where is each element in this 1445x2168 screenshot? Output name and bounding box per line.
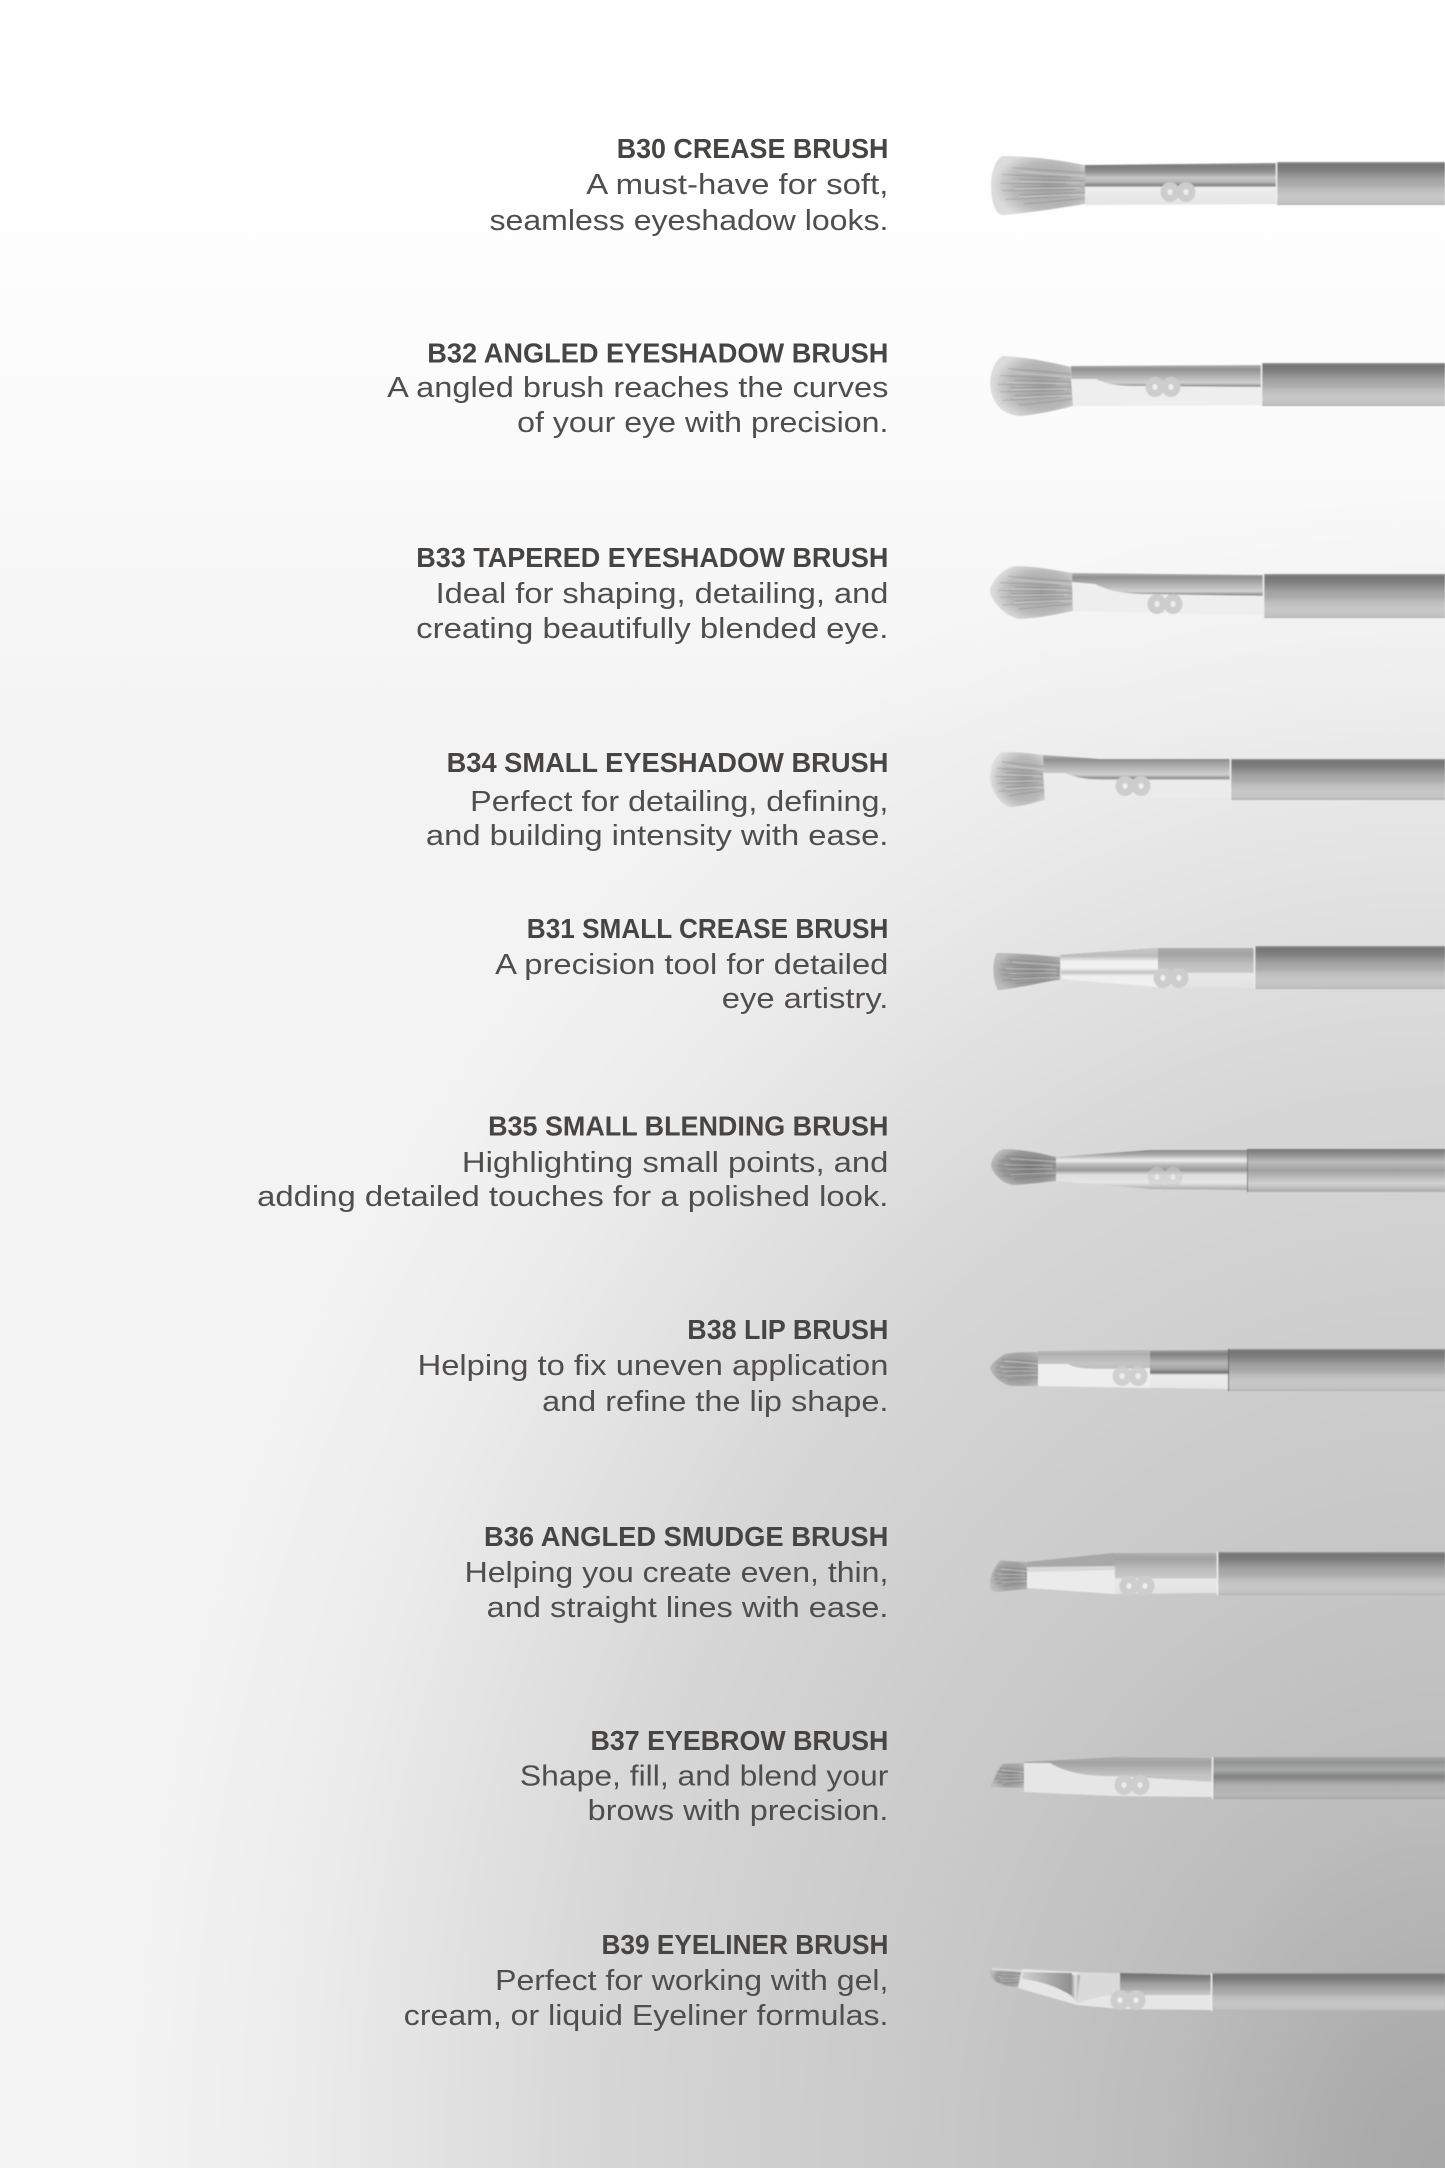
text block: B34: and building intensity with ease. [426, 820, 888, 852]
panel: B32 angled eyeshadow brush [387, 338, 1445, 439]
text block: B39: Perfect for working with gel, [495, 1965, 888, 1997]
brush: B37 [990, 1757, 1445, 1799]
text block: B33 [416, 542, 888, 645]
panel: B30 crease brush [490, 133, 1445, 237]
text block: B31: A precision tool for detailed [495, 949, 888, 981]
text block: B38: Helping to fix uneven application [418, 1350, 888, 1382]
panel: B34 small eyeshadow brush [426, 747, 1445, 852]
text block: B36: and straight lines with ease. [487, 1592, 888, 1624]
text block: B35 [257, 1111, 888, 1213]
text block: B38 [418, 1314, 888, 1418]
text block: B34: Perfect for detailing, defining, [470, 786, 888, 818]
text block: B37 [520, 1725, 889, 1827]
brush: B32 [990, 356, 1445, 416]
brush: B33 [990, 566, 1445, 619]
panel: B37 eyebrow brush [520, 1725, 1445, 1827]
text block: B37: B37 EYEBROW BRUSH [590, 1725, 888, 1756]
text block: B31: B31 SMALL CREASE BRUSH [527, 913, 888, 944]
text block: B30: B30 CREASE BRUSH [617, 133, 888, 164]
text block: B36 [465, 1521, 888, 1624]
brush: B30 [991, 156, 1445, 215]
text block: B39 [404, 1929, 888, 2032]
text block: B36: B36 ANGLED SMUDGE BRUSH [484, 1521, 888, 1552]
brush: B31 [993, 946, 1445, 990]
text block: B33: creating beautifully blended eye. [416, 613, 888, 645]
text block: B35: Highlighting small points, and [462, 1147, 888, 1179]
text block: B32: of your eye with precision. [517, 407, 888, 439]
text block: B30 [490, 133, 888, 237]
text block: B33: B33 TAPERED EYESHADOW BRUSH [416, 542, 888, 573]
text block: B35: B35 SMALL BLENDING BRUSH [488, 1111, 888, 1142]
text block: B34: B34 SMALL EYESHADOW BRUSH [447, 747, 888, 778]
text block: B31: eye artistry. [722, 983, 888, 1015]
brush: B36 [990, 1552, 1445, 1595]
panel: B31 small crease brush [495, 913, 1445, 1015]
panel: B36 angled smudge brush [465, 1521, 1445, 1624]
text block: B36: Helping you create even, thin, [465, 1557, 888, 1589]
brush: B38 [990, 1349, 1445, 1391]
panel: B35 small blending brush [257, 1111, 1445, 1213]
text block: B38: and refine the lip shape. [542, 1386, 888, 1418]
text block: B33: Ideal for shaping, detailing, and [436, 578, 888, 610]
text block: B31 [495, 913, 888, 1015]
text block: B30: A must-have for soft, [586, 169, 888, 201]
text block: B39: cream, or liquid Eyeliner formulas. [404, 2000, 888, 2032]
text block: B30: seamless eyeshadow looks. [490, 205, 888, 237]
text block: B32: B32 ANGLED EYESHADOW BRUSH [427, 338, 888, 369]
text block: B32: A angled brush reaches the curves [387, 372, 888, 404]
text block: B37: brows with precision. [588, 1795, 888, 1827]
text block: B38: B38 LIP BRUSH [687, 1314, 888, 1345]
panel: B33 tapered eyeshadow brush [416, 542, 1445, 645]
brush: B35 [991, 1149, 1445, 1192]
panel: B39 eyeliner brush [404, 1929, 1445, 2032]
text block: B35: adding detailed touches for a polished look. [257, 1181, 888, 1213]
brush: B39 [990, 1968, 1445, 2011]
text block: B34 [426, 747, 888, 852]
text block: B32 [387, 338, 888, 439]
panel: B38 lip brush [418, 1314, 1445, 1418]
brush: B34 [990, 752, 1445, 807]
text block: B37: Shape, fill, and blend your [520, 1760, 889, 1792]
text block: B39: B39 EYELINER BRUSH [602, 1929, 888, 1960]
